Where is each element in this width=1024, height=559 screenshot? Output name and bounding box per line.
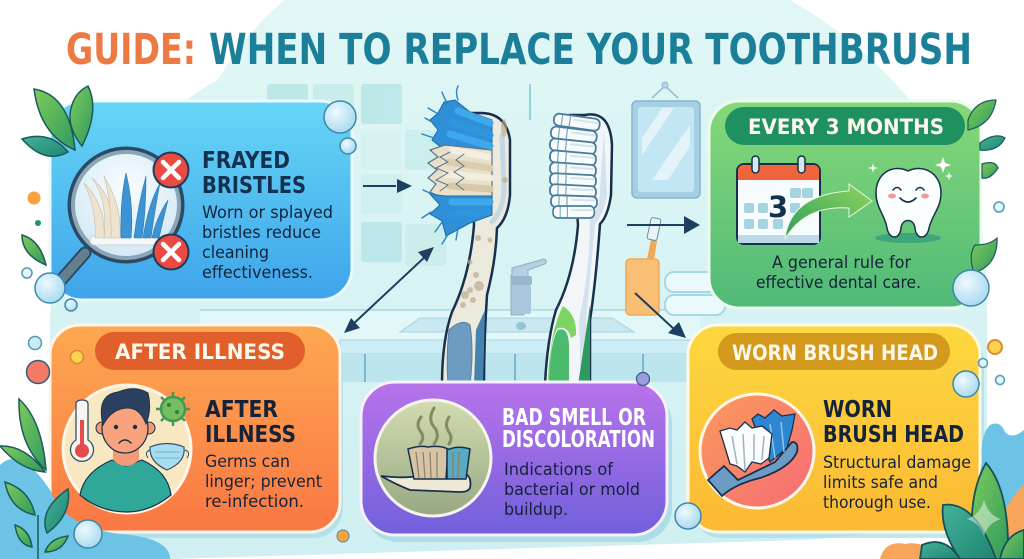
decor: leaf and bubble panel two <box>953 202 1004 306</box>
badge: worn brush head: WORN BRUSH HEAD <box>732 341 938 365</box>
panel: after illness <box>50 325 343 538</box>
wall tiles <box>267 84 531 266</box>
body: worn brush head: limits safe and <box>823 473 938 492</box>
new brush handle <box>545 114 612 385</box>
body: frayed bristles: bristles reduce <box>202 223 321 242</box>
new brush white bristles <box>549 113 600 218</box>
icon: sick person <box>63 385 191 513</box>
arrow to worn brush head <box>635 293 686 338</box>
icon: red x upper <box>154 152 188 188</box>
decor: dots left <box>22 192 84 384</box>
heading: after illness: AFTER <box>205 397 278 423</box>
towels <box>665 272 725 315</box>
beige strand zigzag <box>436 152 464 191</box>
icon: smelly brush <box>375 400 491 516</box>
title: guide: GUIDE: <box>66 25 196 75</box>
icon: calendar: 3 <box>768 190 788 224</box>
grime stains <box>460 119 508 308</box>
body: bad smell: Indications of <box>504 460 614 479</box>
old frayed toothbrush <box>422 86 510 385</box>
heading: worn: WORN <box>823 397 892 423</box>
badge: worn brush head <box>718 333 950 370</box>
body: worn brush head: Structural damage <box>823 453 971 472</box>
decor: bottom right plant <box>920 463 1024 559</box>
badge: every 3 months: EVERY 3 MONTHS <box>748 115 944 139</box>
new clean toothbrush <box>545 113 612 385</box>
icon: happy tooth <box>868 157 953 243</box>
new brush green grip <box>548 306 576 380</box>
panel shadow <box>53 331 343 538</box>
arrow double headed <box>344 247 434 333</box>
old brush blue side <box>474 310 485 385</box>
body: worn brush head: thorough use. <box>823 493 931 512</box>
tuft bands upper <box>446 111 490 214</box>
heading: brush head: BRUSH HEAD <box>823 422 964 448</box>
tuft outlines and wisps <box>422 86 458 244</box>
mirror <box>632 82 700 198</box>
body: every 3 months: effective dental care. <box>756 273 921 292</box>
icon: magnifying glass <box>55 150 181 287</box>
panel card purple <box>361 382 667 535</box>
badge: after illness <box>95 332 305 370</box>
panel card green <box>709 101 981 308</box>
panel shadow <box>364 390 672 542</box>
body: after illness: linger; prevent <box>205 472 323 491</box>
old brush grip <box>447 322 472 385</box>
panel: every 3 months <box>709 101 981 308</box>
decor: bubble bottom left <box>74 520 102 548</box>
heading: discoloration: DISCOLORATION <box>502 427 655 453</box>
frayed beige mass <box>428 145 492 199</box>
heading: bad smell: BAD SMELL OR <box>502 405 646 431</box>
panel card orange <box>50 325 340 532</box>
icon: red x lower <box>154 234 188 270</box>
heading: after illness line 2: ILLNESS <box>205 422 296 448</box>
icon: worn brush head <box>700 394 814 508</box>
icon: calendar <box>737 156 820 244</box>
decor: leaves top left <box>22 86 93 156</box>
title <box>66 25 972 75</box>
body: frayed bristles: cleaning <box>202 243 269 262</box>
panel: frayed bristles <box>50 101 352 300</box>
body: frayed bristles: Worn or splayed <box>202 203 333 222</box>
body: after illness: Germs can <box>205 452 290 471</box>
frayed upper blue mass <box>430 100 492 155</box>
old brush head sheen <box>492 135 504 222</box>
badge: after illness: AFTER ILLNESS <box>115 340 285 364</box>
heading: frayed bristles line 2: BRISTLES <box>202 173 306 199</box>
bathroom scene <box>200 82 725 382</box>
decor: small leaf left <box>22 235 46 265</box>
badge: every 3 months <box>725 107 965 145</box>
body: bad smell: bacterial or mold <box>504 480 640 499</box>
body: after illness: re-infection. <box>205 492 304 511</box>
new brush light blue edge <box>579 130 607 385</box>
decor: sparkle <box>967 500 1001 536</box>
panel shadow <box>692 332 984 538</box>
icon: thermometer <box>71 400 94 461</box>
icon: virus <box>156 392 190 426</box>
arrows <box>344 179 700 338</box>
body: frayed bristles: effectiveness. <box>202 263 313 282</box>
decor: bottom left plant <box>0 399 69 559</box>
arrow: calendar to tooth <box>785 184 872 239</box>
heading: frayed bristles: FRAYED <box>202 148 290 174</box>
panel card yellow <box>688 325 980 532</box>
counter and cabinets <box>200 310 700 382</box>
arrow to every 3 months <box>627 216 700 234</box>
icon: face mask <box>146 444 189 470</box>
decor: bottom right orange blob <box>880 543 940 559</box>
cup with small toothbrush <box>626 217 661 315</box>
decor: bubbles panel one <box>35 101 356 311</box>
panel: worn brush head <box>688 325 984 538</box>
panel card blue <box>50 101 352 300</box>
frayed lower blue mass <box>430 194 492 236</box>
decor: right dots and bubbles <box>337 340 1004 542</box>
decor: leaves top right <box>968 100 1005 178</box>
arrow to frayed brush <box>363 179 412 193</box>
body: bad smell: buildup. <box>504 500 568 519</box>
old brush handle <box>442 113 510 385</box>
panel: bad smell or discoloration <box>361 382 672 542</box>
decor: bottom left blue blob <box>0 459 170 559</box>
body: every 3 months: A general rule for <box>772 253 911 272</box>
decor: bottom right blue blob <box>979 424 1024 559</box>
decor: bottom right orange leaf <box>985 485 1024 559</box>
faucet <box>511 259 546 315</box>
